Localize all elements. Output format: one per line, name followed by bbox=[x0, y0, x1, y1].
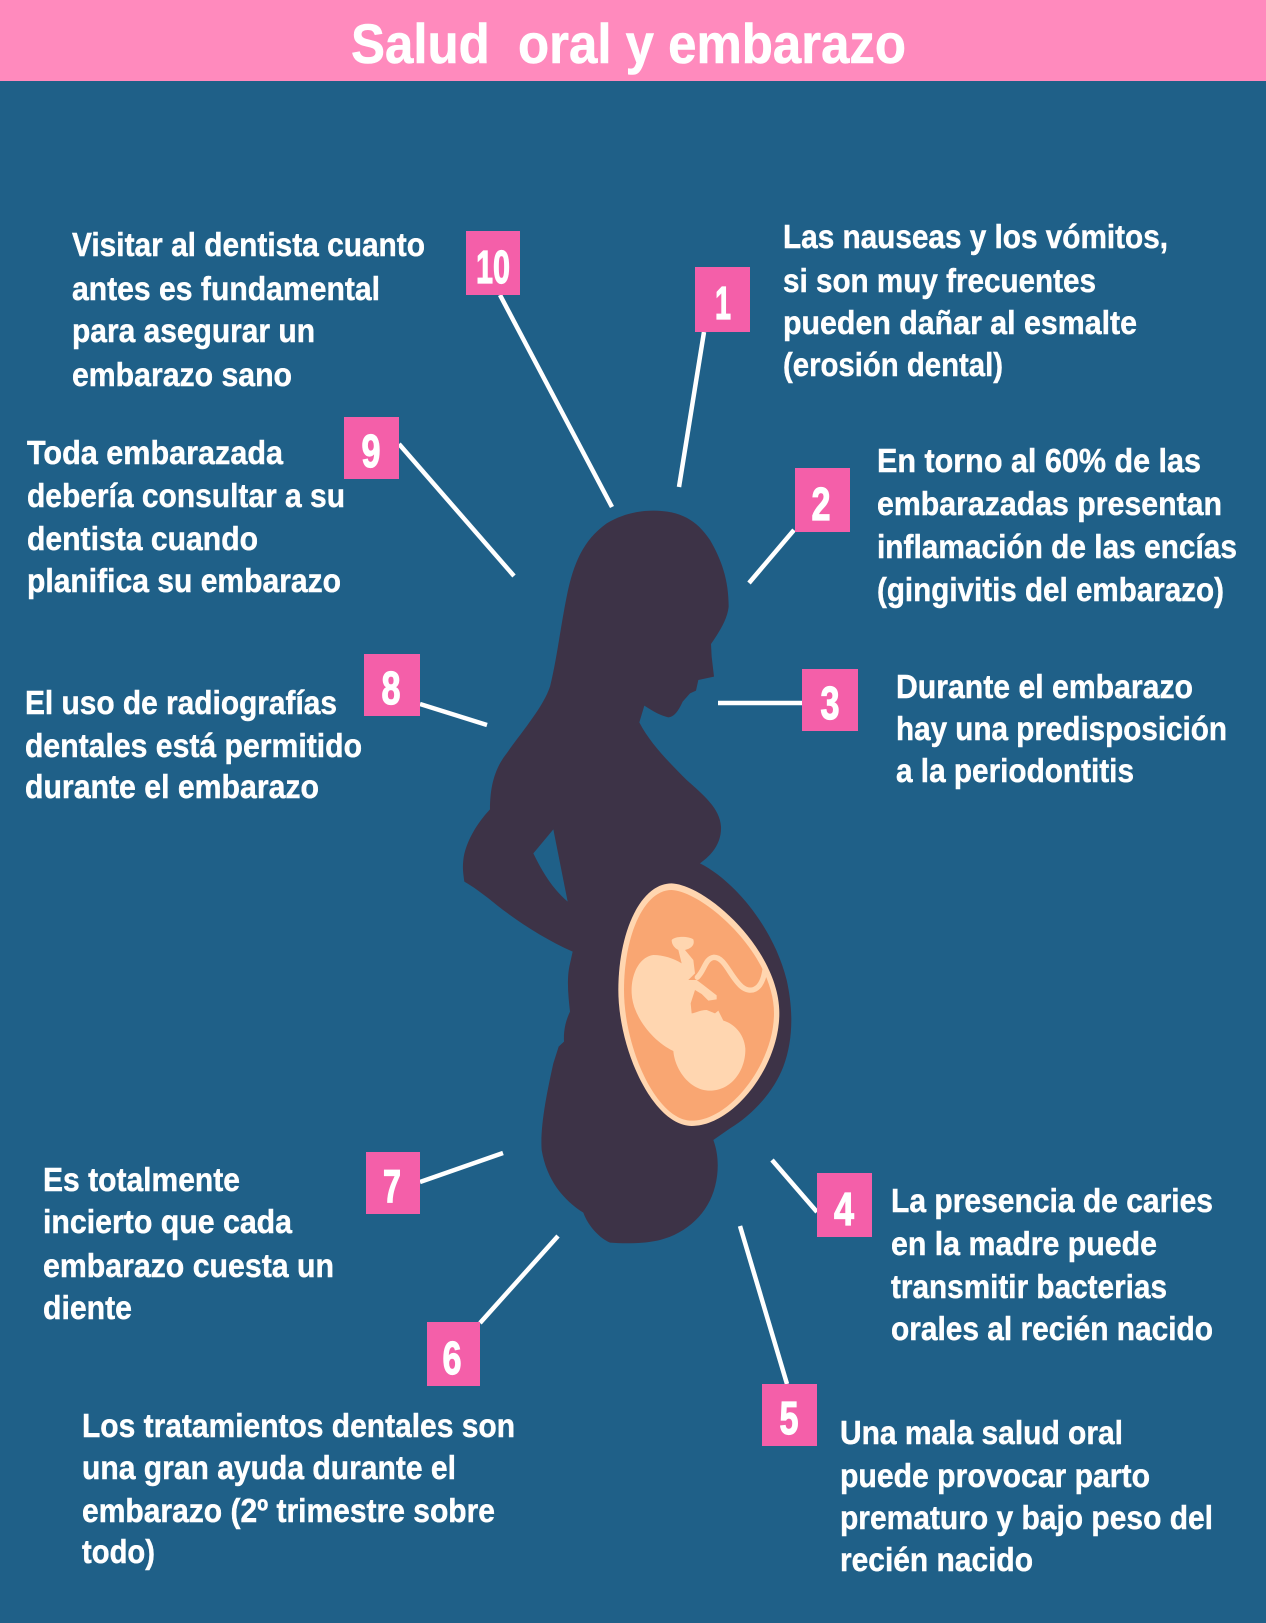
text 9: planifica su embarazo bbox=[27, 562, 341, 599]
text 1 bbox=[783, 218, 1168, 383]
badge 1 bbox=[695, 267, 750, 332]
text 8: El uso de radiografías bbox=[25, 684, 337, 721]
text 10 bbox=[72, 226, 425, 393]
text 3 bbox=[896, 668, 1227, 789]
badge 6: 6 bbox=[442, 1332, 462, 1384]
text 6 bbox=[82, 1407, 515, 1570]
text 5 bbox=[840, 1414, 1213, 1578]
text 10: Visitar al dentista cuanto bbox=[72, 226, 425, 263]
text 10: para asegurar un bbox=[72, 312, 315, 349]
text 7: embarazo cuesta un bbox=[43, 1247, 334, 1284]
text 6: embarazo (2º trimestre sobre bbox=[82, 1492, 495, 1529]
title banner: Salud oral y embarazo bbox=[351, 12, 906, 75]
badge 4 bbox=[817, 1173, 872, 1237]
badge 5 bbox=[762, 1384, 817, 1446]
text 5: recién nacido bbox=[840, 1541, 1033, 1578]
text 5: puede provocar parto bbox=[840, 1457, 1150, 1494]
womb with fetus bbox=[618, 883, 779, 1126]
text 2: embarazadas presentan bbox=[877, 485, 1222, 522]
text 6: una gran ayuda durante el bbox=[82, 1449, 456, 1486]
text 5: Una mala salud oral bbox=[840, 1414, 1123, 1451]
text 4: en la madre puede bbox=[891, 1225, 1157, 1262]
text 10: antes es fundamental bbox=[72, 270, 380, 307]
text 9: dentista cuando bbox=[27, 520, 258, 557]
badge 7 bbox=[366, 1152, 420, 1214]
text 1: Las nauseas y los vómitos, bbox=[783, 218, 1168, 255]
badge 3 bbox=[802, 669, 858, 731]
text 2: (gingivitis del embarazo) bbox=[877, 571, 1224, 608]
text 9: Toda embarazada bbox=[27, 434, 284, 471]
text 4: orales al recién nacido bbox=[891, 1310, 1213, 1347]
text 10: embarazo sano bbox=[72, 356, 292, 393]
badge 1: 1 bbox=[715, 277, 731, 329]
badge 6 bbox=[427, 1322, 480, 1386]
pregnant woman silhouette bbox=[463, 511, 791, 1243]
text 7 bbox=[43, 1161, 334, 1326]
badge 10 bbox=[466, 231, 520, 295]
badge 2: 2 bbox=[812, 478, 830, 530]
text 6: todo) bbox=[82, 1533, 155, 1570]
badge 7: 7 bbox=[383, 1160, 401, 1212]
text 2: En torno al 60% de las bbox=[877, 442, 1201, 479]
text 8: durante el embarazo bbox=[25, 768, 319, 805]
connector lines bbox=[399, 295, 817, 1384]
badge 8 bbox=[364, 654, 420, 716]
badge 5: 5 bbox=[780, 1392, 798, 1444]
text 2 bbox=[877, 442, 1237, 608]
text 3: Durante el embarazo bbox=[896, 668, 1193, 705]
text 6: Los tratamientos dentales son bbox=[82, 1407, 515, 1444]
text 8 bbox=[25, 684, 362, 805]
badge 2 bbox=[795, 468, 850, 532]
text 1: (erosión dental) bbox=[783, 346, 1003, 383]
text 7: Es totalmente bbox=[43, 1161, 240, 1198]
text 9 bbox=[27, 434, 345, 599]
text 4: transmitir bacterias bbox=[891, 1268, 1167, 1305]
text 4 bbox=[891, 1182, 1213, 1347]
badge 4: 4 bbox=[834, 1183, 854, 1235]
text 8: dentales está permitido bbox=[25, 727, 362, 764]
text 7: incierto que cada bbox=[43, 1203, 293, 1240]
text 1: si son muy frecuentes bbox=[783, 262, 1096, 299]
text 9: debería consultar a su bbox=[27, 477, 345, 514]
badge 9 bbox=[344, 417, 399, 479]
badge 8: 8 bbox=[382, 662, 400, 714]
badge 9: 9 bbox=[362, 425, 380, 477]
text 2: inflamación de las encías bbox=[877, 528, 1237, 565]
text 5: prematuro y bajo peso del bbox=[840, 1499, 1213, 1536]
text 7: diente bbox=[43, 1289, 132, 1326]
text 4: La presencia de caries bbox=[891, 1182, 1213, 1219]
text 3: hay una predisposición bbox=[896, 710, 1227, 747]
text 1: pueden dañar al esmalte bbox=[783, 304, 1137, 341]
badge 3: 3 bbox=[820, 677, 840, 729]
title banner bbox=[0, 0, 1266, 81]
text 3: a la periodontitis bbox=[896, 752, 1134, 789]
badge 10: 10 bbox=[476, 241, 510, 293]
